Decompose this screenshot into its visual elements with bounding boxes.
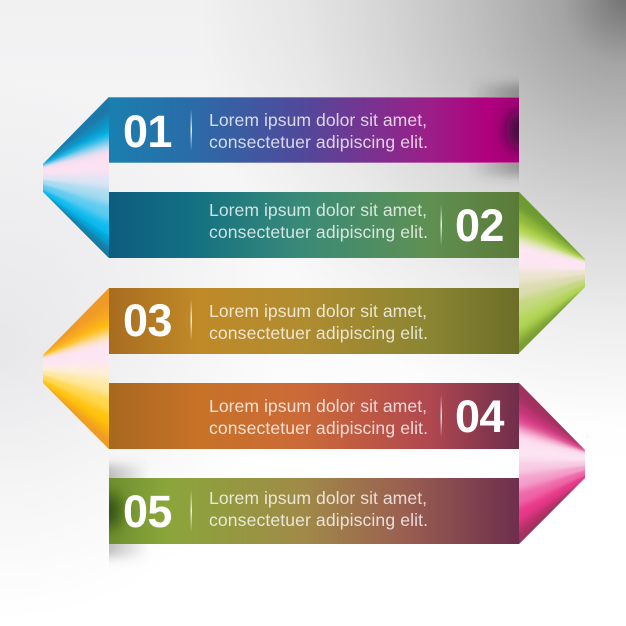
divider [440, 395, 442, 437]
arrow 3: orange cone [43, 288, 109, 449]
divider [190, 109, 192, 151]
text 3: consectetuer adipiscing elit. [209, 323, 428, 343]
text 5: Lorem ipsum dolor sit amet, [209, 488, 427, 508]
band 3 [109, 288, 519, 354]
text 1: consectetuer adipiscing elit. [209, 132, 428, 152]
dark fold shading [506, 110, 536, 150]
text 3: Lorem ipsum dolor sit amet, [209, 301, 427, 321]
text 4 [209, 396, 428, 438]
infographic [43, 79, 585, 562]
text 4: Lorem ipsum dolor sit amet, [209, 396, 427, 416]
number 01: 01 [123, 106, 172, 157]
text 5 [209, 488, 428, 530]
arrow 1: blue cone [43, 97, 109, 258]
text 3 [209, 301, 428, 343]
number 05: 05 [123, 486, 172, 537]
shadow: band 5 left end [109, 465, 149, 557]
band 5 [95, 478, 519, 544]
text 2: consectetuer adipiscing elit. [209, 222, 428, 242]
number 02: 02 [455, 200, 504, 251]
number 03: 03 [123, 295, 172, 346]
text 2: Lorem ipsum dolor sit amet, [209, 200, 427, 220]
arrow 4: pink cone [519, 383, 585, 544]
arrow 2: green cone [519, 192, 585, 353]
divider [440, 204, 442, 246]
dark fold shading [95, 493, 121, 529]
divider [190, 299, 192, 341]
band 2 [109, 192, 519, 258]
divider [190, 490, 192, 532]
text 5: consectetuer adipiscing elit. [209, 510, 428, 530]
band 4 [109, 383, 519, 449]
text 1 [209, 110, 428, 152]
text 1: Lorem ipsum dolor sit amet, [209, 110, 427, 130]
shadow: band 1 right end [468, 84, 519, 176]
text 4: consectetuer adipiscing elit. [209, 418, 428, 438]
number 04: 04 [455, 391, 504, 442]
band 1 [109, 97, 536, 163]
text 2 [209, 200, 428, 242]
